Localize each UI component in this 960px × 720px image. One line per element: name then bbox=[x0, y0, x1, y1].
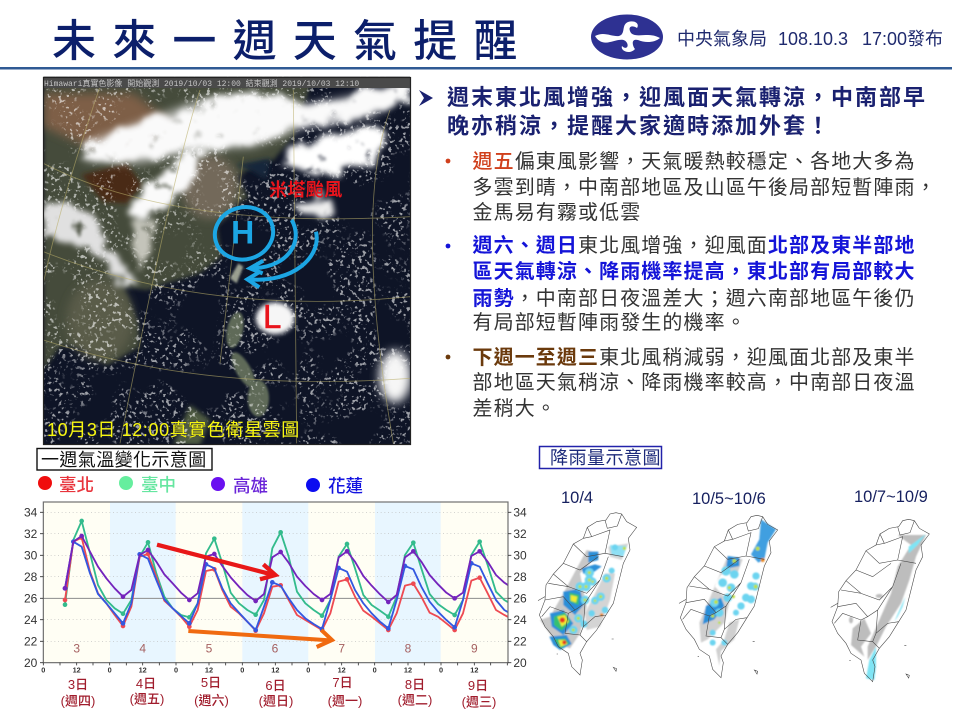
text block: friday forecast: 金馬易有霧或低雲 bbox=[472, 201, 641, 224]
left y axis labels: 20 bbox=[24, 656, 38, 670]
label: low pressure L: L bbox=[263, 298, 281, 335]
map: rainfall 10/4 bbox=[538, 513, 637, 675]
alternating day bands bbox=[110, 502, 441, 663]
x axis day and weekday labels: (週三) bbox=[462, 694, 496, 710]
left y axis labels bbox=[24, 506, 38, 670]
heading bullet arrow bbox=[419, 90, 433, 106]
label: typhoon name: 米塔颱風 bbox=[269, 180, 343, 200]
text block: friday forecast: 多雲到晴，中南部地區及山區午後局部短暫陣雨， bbox=[472, 176, 937, 199]
text block: weekend forecast bbox=[446, 234, 916, 334]
header: issuer and issue time: 108.10.3 bbox=[778, 29, 848, 49]
icon: central weather bureau logo bbox=[591, 14, 663, 60]
arrow: orange falling min temperature bbox=[188, 630, 332, 647]
x axis day and weekday labels: (週二) bbox=[398, 692, 432, 708]
land: yellow sea bbox=[237, 158, 270, 180]
clouds: soft haze beneath northern band bbox=[83, 87, 410, 163]
day numbers: 9 bbox=[471, 641, 478, 655]
panel: satellite cloud image bbox=[43, 77, 411, 447]
series: hualien bbox=[65, 542, 513, 630]
x axis hour labels: 0 bbox=[174, 665, 178, 674]
clouds: southwestern band bbox=[43, 203, 137, 283]
heading box: weekly temperature: 一週氣溫變化示意圖 bbox=[41, 450, 207, 470]
right y axis labels bbox=[513, 506, 527, 670]
x axis hour labels: 0 bbox=[240, 665, 244, 674]
text block: next week forecast: 下週一至週三東北風稍減弱，迎風面北部及東半 bbox=[472, 346, 916, 369]
day numbers: 5 bbox=[206, 641, 213, 655]
land: philippines luzon bbox=[225, 310, 245, 350]
icon: high pressure system and wind arrows bbox=[209, 201, 317, 287]
left y axis labels: 32 bbox=[24, 527, 38, 541]
land: north china plain haze bbox=[182, 155, 238, 218]
x axis day and weekday labels: (週日) bbox=[259, 694, 293, 708]
clouds: tropical low bbox=[256, 302, 294, 334]
legend: cities bbox=[38, 475, 363, 496]
text block: weekend forecast: 區天氣轉涼、降雨機率提高，東北部有局部較大 bbox=[472, 259, 916, 283]
series: taichung bbox=[65, 521, 513, 617]
left y axis labels: 24 bbox=[24, 613, 38, 627]
header: issuer and issue time: 中央氣象局 bbox=[677, 29, 767, 49]
x axis day and weekday labels: 8日 bbox=[405, 677, 425, 692]
right y axis labels: 34 bbox=[513, 506, 527, 520]
day numbers: 4 bbox=[139, 641, 146, 655]
x axis hour labels: 12 bbox=[205, 665, 213, 674]
x axis day and weekday labels: 3日 bbox=[68, 677, 88, 692]
x axis day and weekday labels: (週四) bbox=[61, 694, 95, 708]
heading text bbox=[447, 85, 927, 138]
text block: weekend forecast: 有局部短暫陣雨發生的機率。 bbox=[472, 311, 747, 334]
legend: cities: 花蓮 bbox=[328, 476, 363, 496]
clouds: wispy layers bbox=[43, 80, 410, 283]
clouds: main northern band bbox=[83, 80, 410, 160]
map: rainfall 10/5 to 10/6 bbox=[679, 515, 778, 678]
grid lines bbox=[43, 87, 410, 443]
left y axis labels: 28 bbox=[24, 570, 38, 584]
image header text: Himawari真實色影像 開始觀測 2019/10/03 12:00 結束觀測 2019/10/03 12:10 bbox=[44, 78, 359, 89]
left y axis labels: 30 bbox=[24, 549, 38, 563]
clouds: southeast corner bbox=[379, 351, 411, 403]
map label: 10/5 to 10/6: 10/5~10/6 bbox=[692, 490, 766, 508]
x axis hour labels: 0 bbox=[439, 665, 443, 674]
x axis hour labels: 0 bbox=[108, 665, 112, 674]
text block: friday forecast: 週五偏東風影響，天氣暖熱較穩定、各地大多為 bbox=[472, 150, 916, 173]
land: dark brown plateau bbox=[82, 163, 142, 203]
text block: weekend forecast: 雨勢，中南部日夜溫差大；週六南部地區午後仍 bbox=[472, 287, 916, 310]
left y axis labels: 26 bbox=[24, 592, 38, 606]
heading box: rainfall: 降雨量示意圖 bbox=[550, 448, 661, 468]
right y axis labels: 22 bbox=[513, 635, 527, 649]
image header strip bbox=[43, 77, 410, 88]
day numbers: 8 bbox=[405, 641, 412, 655]
x axis hour labels: 12 bbox=[404, 665, 412, 674]
x axis hour labels: 0 bbox=[373, 665, 377, 674]
x axis hour labels: 12 bbox=[73, 665, 81, 674]
texture: scattered small clouds bbox=[43, 183, 410, 447]
line chart: weekly temperature bbox=[24, 502, 527, 674]
x axis hour labels bbox=[41, 665, 478, 674]
land: philippines visayas bbox=[230, 351, 256, 388]
text block: next week forecast: 差稍大。 bbox=[472, 397, 557, 420]
map: rainfall 10/7 to 10/9 bbox=[831, 519, 929, 682]
axis ticks bbox=[40, 512, 511, 665]
clouds: typhoon mitag shield bbox=[283, 127, 387, 173]
x axis hour labels: 12 bbox=[139, 665, 147, 674]
clouds: diagonal band over china bbox=[127, 150, 207, 220]
right y axis labels: 32 bbox=[513, 527, 527, 541]
header: issuer and issue time: 17:00發布 bbox=[862, 29, 943, 49]
x axis hour labels: 12 bbox=[338, 665, 346, 674]
x axis day and weekday labels: 5日 bbox=[201, 675, 221, 690]
arrow: red falling max temperature bbox=[157, 545, 275, 579]
x axis day and weekday labels: 7日 bbox=[332, 675, 353, 690]
land: brown desert bbox=[44, 88, 164, 148]
map label: 10/4: 10/4 bbox=[561, 489, 593, 507]
day numbers: 3 bbox=[73, 641, 80, 655]
x axis day and weekday labels: (週一) bbox=[328, 694, 362, 708]
text block: weekend forecast: 週六、週日東北風增強，迎風面北部及東半部地 bbox=[472, 234, 916, 257]
x axis day and weekday labels: 4日 bbox=[136, 676, 156, 691]
x axis day and weekday labels: (週六) bbox=[194, 693, 229, 708]
right y axis labels: 20 bbox=[513, 656, 527, 670]
x axis hour labels: 0 bbox=[41, 665, 45, 674]
land: asian mainland bbox=[43, 77, 313, 370]
text block: friday forecast bbox=[446, 150, 937, 224]
chart background bbox=[43, 502, 508, 663]
text block: next week forecast bbox=[446, 346, 916, 420]
heading text: 週末東北風增強，迎風面天氣轉涼，中南部早 bbox=[447, 85, 927, 110]
x axis hour labels: 12 bbox=[470, 665, 478, 674]
left y axis labels: 34 bbox=[24, 506, 38, 520]
land: indochina bbox=[67, 280, 133, 360]
x axis day and weekday labels bbox=[61, 675, 496, 710]
land: taiwan bbox=[230, 263, 243, 283]
heading text: 晚亦稍涼，提醒大家適時添加外套！ bbox=[447, 114, 831, 138]
left y axis labels: 22 bbox=[24, 635, 38, 649]
x axis day and weekday labels: 6日 bbox=[265, 678, 286, 693]
day numbers: 7 bbox=[338, 641, 345, 655]
clouds: south china streak bbox=[133, 220, 153, 267]
caption: satellite image date: 10月3日 12:00真實色衛星雲圖 bbox=[47, 420, 300, 440]
series: kaohsiung bbox=[65, 536, 513, 602]
x axis day and weekday labels: 9日 bbox=[468, 678, 488, 693]
right y axis labels: 26 bbox=[513, 592, 527, 606]
icon: high pressure system and wind arrows: H bbox=[231, 214, 254, 250]
right y axis labels: 24 bbox=[513, 613, 527, 627]
legend: cities: 臺中 bbox=[141, 475, 176, 495]
legend: cities: 高雄 bbox=[233, 476, 268, 496]
clouds: typhoon outer band bbox=[297, 197, 330, 217]
text block: next week forecast: 部地區天氣稍涼、降雨機率較高，中南部日夜溫 bbox=[472, 371, 916, 394]
map label: 10/7 to 10/9: 10/7~10/9 bbox=[854, 488, 928, 506]
right y axis labels: 28 bbox=[513, 570, 527, 584]
x axis hour labels: 0 bbox=[306, 665, 310, 674]
series: taipei bbox=[65, 538, 513, 631]
legend: cities: 臺北 bbox=[59, 475, 94, 495]
day numbers: 6 bbox=[272, 641, 279, 655]
day numbers bbox=[73, 641, 478, 655]
x axis hour labels: 12 bbox=[271, 665, 279, 674]
title: 未來一週天氣提醒 bbox=[52, 17, 534, 66]
land: philippines mindanao bbox=[248, 380, 269, 417]
right y axis labels: 30 bbox=[513, 549, 527, 563]
x axis day and weekday labels: (週五) bbox=[130, 692, 164, 706]
land: borneo and palawan bbox=[173, 405, 210, 445]
